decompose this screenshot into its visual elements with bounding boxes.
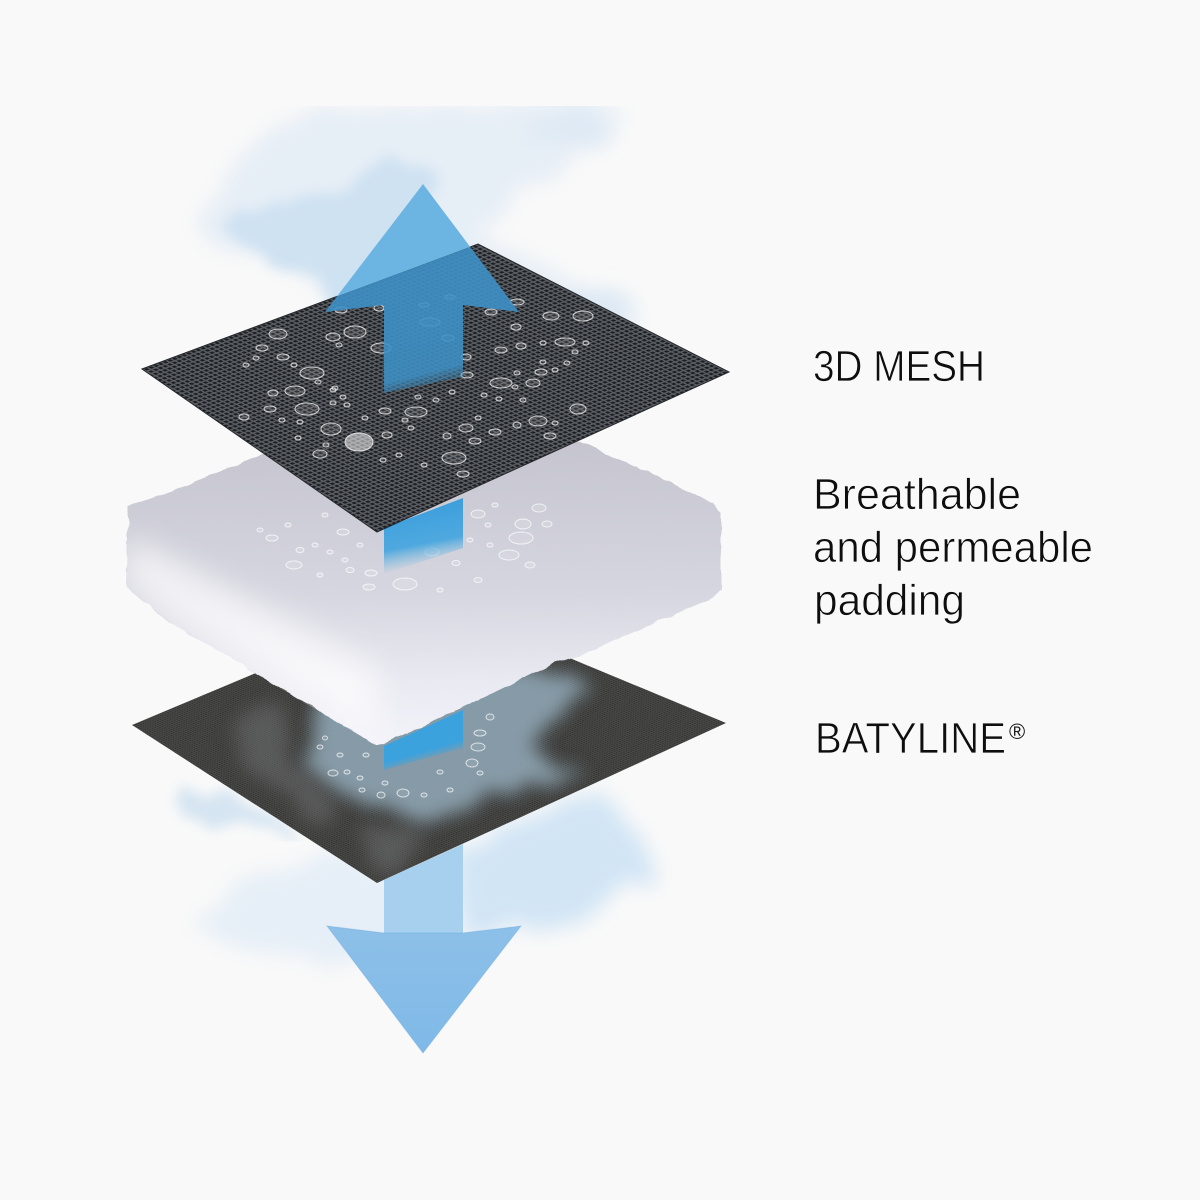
cloud: top vapour	[199, 106, 638, 324]
droplets on padding	[257, 503, 552, 592]
arrow shaft through padding	[384, 498, 463, 574]
layer: BATYLINE fabric	[132, 658, 726, 883]
arrow head above mesh	[336, 184, 470, 297]
arrow: downward air flow	[327, 844, 521, 1053]
arrow shaft	[384, 844, 463, 933]
arrow head	[327, 926, 521, 1053]
droplets on BATYLINE	[317, 714, 494, 798]
label: BATYLINE: ®	[1009, 719, 1025, 744]
padding light front side	[126, 535, 377, 740]
arrow: upward air flow	[325, 184, 519, 393]
layer: 3D mesh	[142, 244, 729, 532]
label: padding description: padding	[814, 576, 965, 625]
padding body	[126, 390, 721, 746]
arrow over mesh	[325, 247, 519, 393]
layer: padding block	[126, 441, 722, 746]
vapour on fabric	[235, 650, 590, 865]
droplets on 3D mesh	[239, 295, 593, 477]
label: 3D MESH: 3D MESH	[813, 342, 985, 391]
label: padding description: and permeable	[813, 523, 1093, 572]
label: BATYLINE: BATYLINE	[815, 714, 1006, 763]
label: padding description	[813, 470, 1093, 625]
fabric sheet	[132, 600, 726, 883]
arrow shaft on BATYLINE	[384, 710, 463, 770]
label: padding description: Breathable	[813, 470, 1021, 519]
cloud: bottom vapour	[178, 785, 650, 965]
